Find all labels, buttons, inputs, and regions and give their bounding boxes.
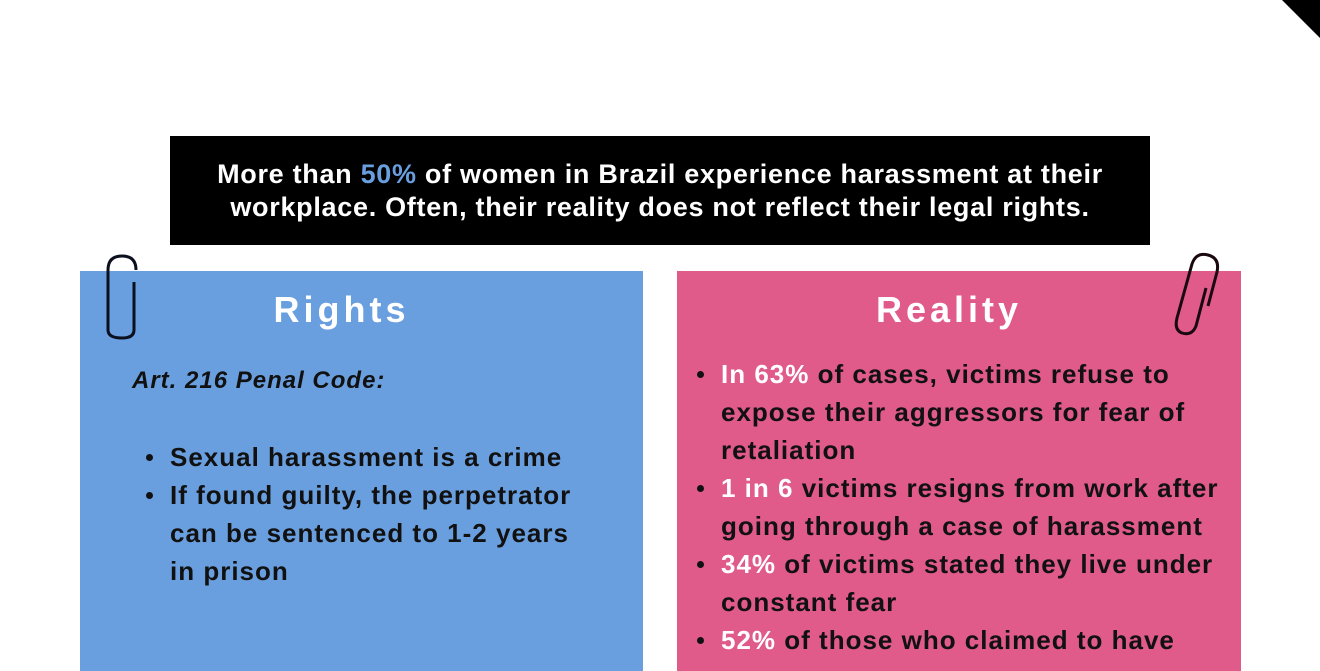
list: reality facts: 1 in 6 victims resigns from work after going through a case of harassment <box>721 473 1219 541</box>
list: reality facts <box>697 359 1219 655</box>
banner: More than 50% of women in Brazil experience harassment at their <box>217 159 1103 189</box>
heading: reality: Reality <box>876 289 1022 330</box>
panel: reality <box>677 271 1241 671</box>
list: reality facts: 34% of victims stated they live under constant fear <box>721 549 1213 617</box>
text: penal code <box>132 367 571 586</box>
text: penal code: Sexual harassment is a crime <box>170 442 562 472</box>
list: reality facts: In 63% of cases, victims refuse to expose their aggressors for fear of retaliation <box>721 359 1185 465</box>
heading: rights: Rights <box>274 289 410 330</box>
list: reality facts: 52% of those who claimed to have <box>721 625 1175 655</box>
icon: paperclip right <box>1174 252 1220 336</box>
banner: workplace. Often, their reality does not reflect their legal rights. <box>230 192 1090 222</box>
icon: paperclip left <box>106 254 138 340</box>
corner triangle <box>1282 0 1320 38</box>
text: penal code: If found guilty, the perpetrator can be sentenced to 1-2 years in prison <box>170 480 571 586</box>
text: penal code: Art. 216 Penal Code: <box>132 367 385 394</box>
panel: rights <box>80 271 643 671</box>
banner <box>170 136 1150 245</box>
